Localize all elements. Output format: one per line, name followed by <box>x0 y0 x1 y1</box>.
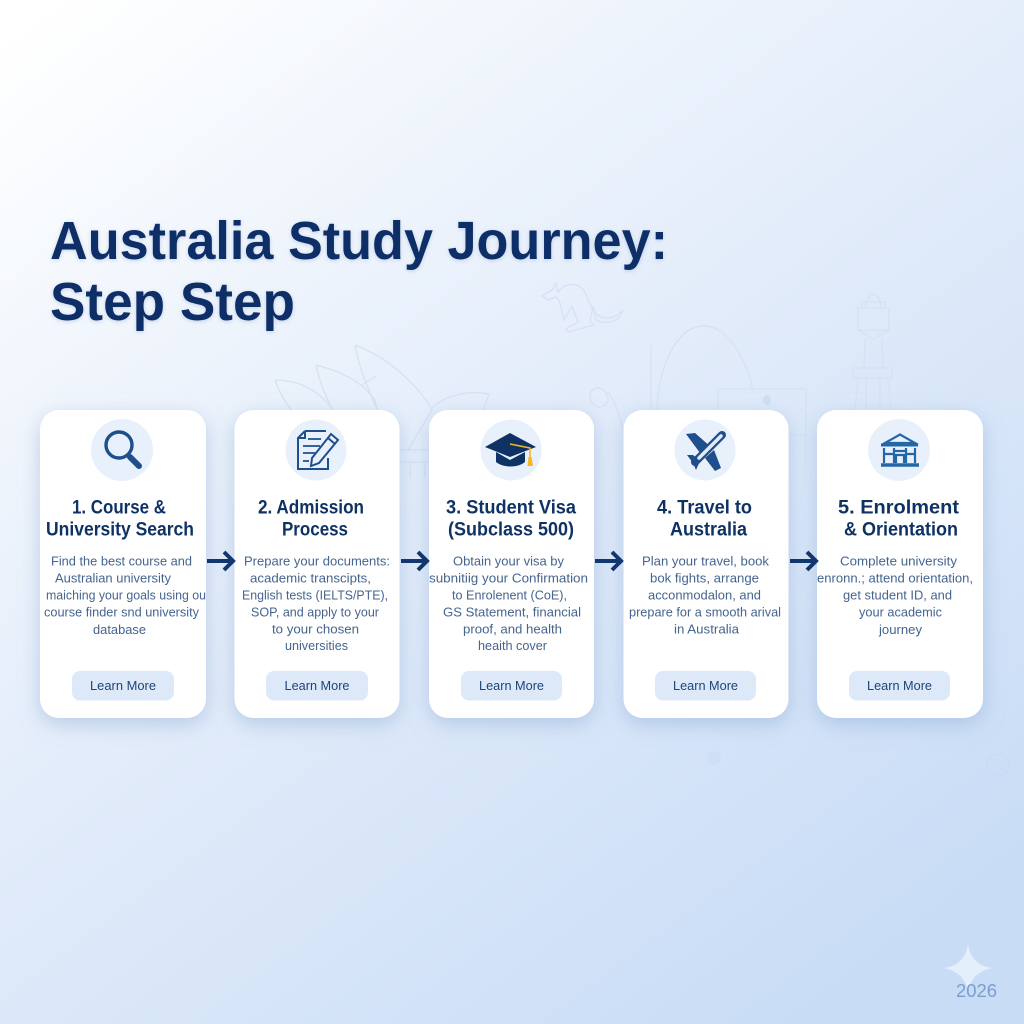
title <box>50 211 668 332</box>
description 5: your academic <box>859 604 942 620</box>
title: Australia Study Journey: <box>50 211 668 271</box>
card 3: student visa <box>429 410 594 718</box>
description 5: get student ID, and <box>843 588 952 602</box>
card 5: enrolment and orientation <box>817 410 983 718</box>
icon: magnifying glass <box>106 432 139 466</box>
heading 3: 3. Student Visa <box>446 498 576 518</box>
decorative ring left <box>707 751 721 765</box>
landmark: ornament dot <box>763 395 771 405</box>
description 3: GS Statement, financial <box>443 604 581 620</box>
description 2: universities <box>285 638 348 653</box>
description 4: Plan your travel, book <box>642 554 770 568</box>
description 5: enronn.; attend orientation, <box>817 570 973 586</box>
description 1: course finder snd university <box>44 604 199 620</box>
description 1: database <box>93 622 146 637</box>
description 2: academic transcipts, <box>250 570 371 586</box>
button 5 <box>849 671 950 700</box>
year label: 2026 <box>956 981 997 1001</box>
heading 2: 2. Admission <box>258 498 364 518</box>
sparkle mark <box>944 944 992 992</box>
decorative ring right <box>987 754 1009 776</box>
description 4: in Australia <box>674 622 740 636</box>
description 5: Complete university <box>840 554 958 568</box>
button 4 <box>655 671 756 700</box>
landmark: dome and spire <box>590 326 806 470</box>
description 2: Prepare your documents: <box>244 554 390 568</box>
description 4: bok fights, arrange <box>650 570 759 586</box>
button 3 <box>461 671 562 700</box>
button 4: Learn More <box>673 678 738 693</box>
description 2: English tests (IELTS/PTE), <box>242 588 388 602</box>
heading 4: Australia <box>670 520 747 540</box>
heading 5 <box>838 498 960 540</box>
description 4: prepare for a smooth arival <box>629 604 781 620</box>
heading 1: 1. Course & <box>72 498 166 518</box>
description 4 <box>629 554 781 636</box>
description 4: acconmodalon, and <box>648 588 761 602</box>
heading 3 <box>446 498 576 540</box>
arrow: step 3 to 4 <box>595 552 621 570</box>
description 3: to Enrolenent (CoE), <box>452 588 567 602</box>
icon: university building <box>881 434 919 465</box>
card 1: course and university search <box>40 410 206 718</box>
description 2 <box>242 554 390 653</box>
description 5: journey <box>878 622 923 637</box>
landmark: steps beside final card <box>789 560 817 668</box>
heading 2: Process <box>282 520 348 540</box>
arrow: step 4 to 5 <box>790 552 816 570</box>
description 3: proof, and health <box>463 622 562 636</box>
description 1: maiching your goals using ou <box>46 588 206 602</box>
heading 5: 5. Enrolment <box>838 498 960 518</box>
heading 5: & Orientation <box>844 520 958 540</box>
heading 1: University Search <box>46 520 194 540</box>
faint Australian landmarks backdrop <box>275 283 892 668</box>
icon: graduation cap <box>485 433 536 466</box>
arrow: step 2 to 3 <box>401 552 427 570</box>
heading 4: 4. Travel to <box>657 498 752 518</box>
button 2 <box>266 671 368 700</box>
landmark: Sydney Opera House <box>275 345 489 478</box>
description 3: subnitiig your Confirmation <box>429 570 588 586</box>
description 3: heaith cover <box>478 638 548 653</box>
description 3 <box>429 554 588 653</box>
button 1: Learn More <box>90 678 156 693</box>
description 2: SOP, and apply to your <box>251 604 380 620</box>
button 1 <box>72 671 174 700</box>
description 1 <box>44 554 206 637</box>
landmark: Sydney Tower <box>853 294 892 410</box>
heading 3: (Subclass 500) <box>448 520 574 540</box>
button 3: Learn More <box>479 678 544 693</box>
icon: airplane <box>686 433 722 471</box>
description 1: Australian university <box>55 570 171 586</box>
description 2: to your chosen <box>272 622 359 636</box>
heading 1 <box>46 498 194 540</box>
heading 2 <box>258 498 364 540</box>
description 3: Obtain your visa by <box>453 554 564 568</box>
arrow: step 1 to 2 <box>207 552 233 570</box>
card 2: admission process <box>234 410 400 718</box>
icon: document and pencil <box>298 431 338 469</box>
button 2: Learn More <box>284 678 350 693</box>
card 4: travel to Australia <box>624 410 788 718</box>
landmark: kangaroo <box>542 283 623 332</box>
title: Step Step <box>50 272 295 332</box>
heading 4 <box>657 498 752 540</box>
description 5 <box>817 554 973 637</box>
button 5: Learn More <box>867 678 932 693</box>
description 1: Find the best course and <box>51 554 192 568</box>
